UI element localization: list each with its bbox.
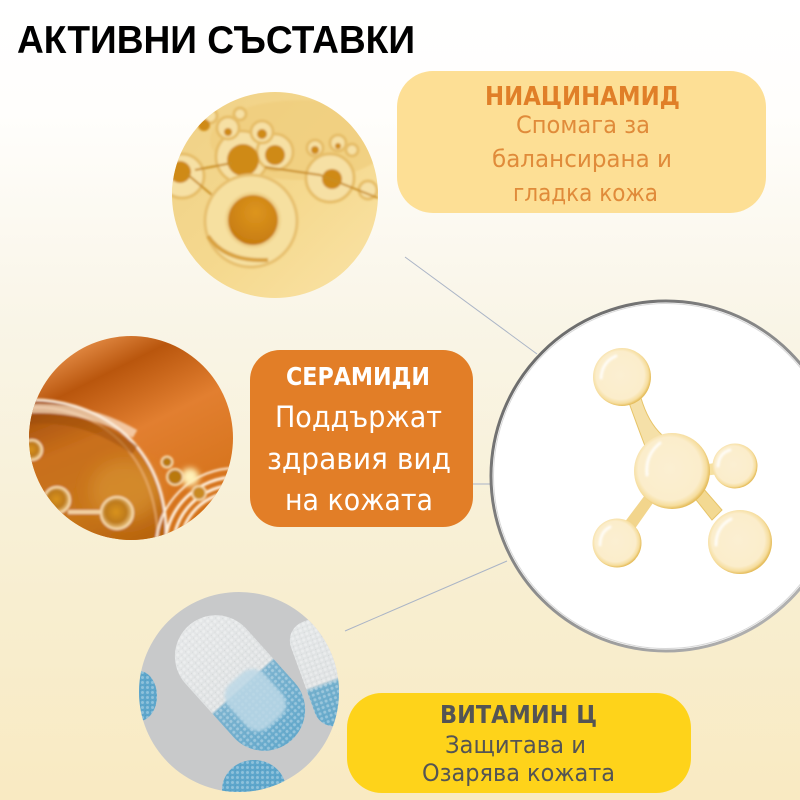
main capsule (175, 615, 306, 751)
molecule lens circle (491, 301, 800, 651)
image: blue and white capsule circle (139, 592, 339, 792)
connector lines (345, 257, 537, 631)
panel: niacinamide (397, 71, 766, 213)
panel: ceramides: на кожата (285, 483, 433, 517)
panel: niacinamide: гладка кожа (513, 179, 658, 207)
panel: ceramides: СЕРАМИДИ (286, 362, 430, 391)
title: АКТИВНИ СЪСТАВКИ (17, 19, 415, 62)
panel: vitamin C (347, 693, 691, 793)
panel: niacinamide: НИАЦИНАМИД (485, 82, 680, 112)
panel: niacinamide: Спомага за (516, 111, 650, 139)
side capsules (139, 620, 339, 792)
lower right rings (153, 466, 229, 538)
panel: niacinamide: балансирана и (492, 145, 672, 173)
icon: molecule (592, 348, 772, 574)
image: golden capsules circle (172, 92, 378, 298)
bubbles (22, 440, 206, 529)
panel: vitamin C: ВИТАМИН Ц (440, 700, 597, 729)
panel: ceramides: здравия вид (267, 442, 451, 476)
image: orange bubbles circle (29, 336, 233, 540)
panel: vitamin C: Защитава и (445, 731, 586, 759)
panel: vitamin C: Озарява кожата (422, 759, 615, 787)
panel: ceramides (250, 350, 473, 527)
bubble rim highlights (25, 400, 166, 545)
panel: ceramides: Поддържат (275, 400, 442, 434)
large capsule (205, 175, 297, 267)
